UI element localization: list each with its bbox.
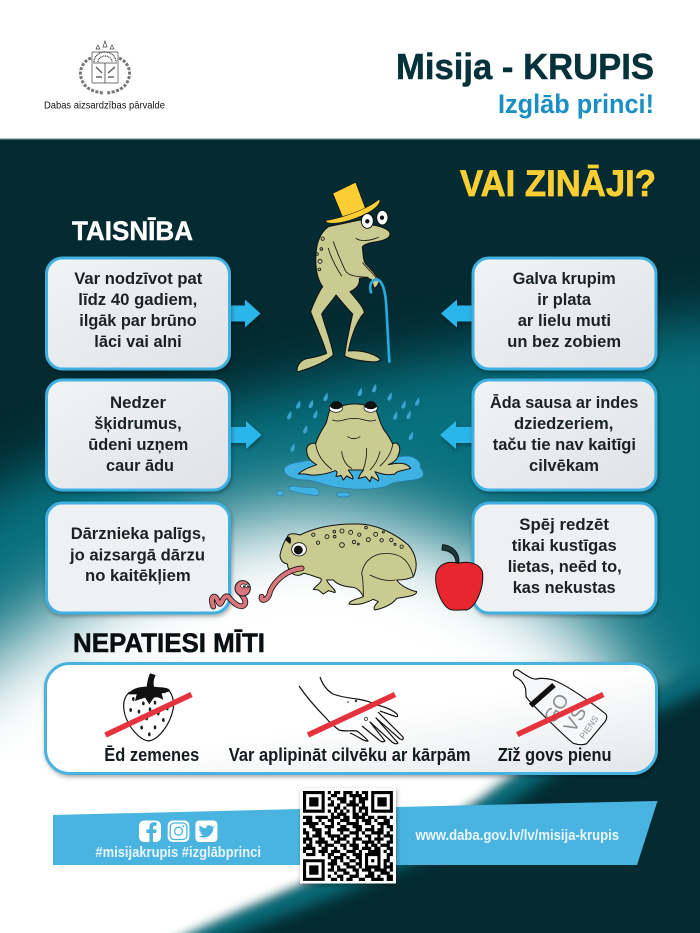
myth: suckles cow milk: [498, 670, 612, 765]
fact box: sight: [473, 503, 656, 613]
subtitle: Izglāb princi!: [498, 89, 654, 119]
heading: NEPATIESI MĪTI: NEPATIESI MĪTI: [73, 628, 265, 658]
fact box: sight: Spēj redzēt: [519, 515, 609, 534]
icon: red apple: [436, 545, 483, 610]
fact box: drinking: Nedzer: [110, 393, 166, 412]
logo text: Dabas aizsardzības pārvalde: [44, 100, 165, 112]
fact box: head: un bez zobiem: [507, 332, 621, 351]
myth: suckles cow milk: PIENS: [577, 714, 601, 741]
hashtags: #misijakrupis #izglābprinci: [95, 844, 261, 861]
myth: eats strawberries: [104, 673, 199, 765]
fact box: gardener: Dārznieka palīgs,: [71, 524, 206, 543]
fact box: gardener: [46, 503, 230, 613]
illustration: toad sitting in rain and puddle: [276, 384, 423, 497]
illustration: old toad with top hat and cane: [297, 182, 390, 372]
arrows pointing to the toads: [228, 300, 475, 449]
header band: [0, 0, 700, 140]
illustration: toad catching a worm with its tongue: [261, 524, 417, 610]
fact box: skin: Āda sausa ar indes: [490, 393, 638, 412]
fact box: sight: tikai kustīgas: [512, 536, 617, 555]
fact box: lifespan: līdz 40 gadiem,: [78, 290, 197, 309]
fact box: skin: dziedzeriem,: [514, 414, 613, 433]
fact box: drinking: caur ādu: [106, 456, 174, 475]
fact box: drinking: [46, 380, 230, 490]
fact box: lifespan: Var nodzīvot pat: [74, 269, 203, 288]
fact box: gardener: jo aizsargā dārzu: [69, 546, 205, 564]
fact box: head: Galva krupim: [513, 269, 616, 288]
myth: suckles cow milk: VS: [560, 703, 591, 736]
logo: state emblem: [80, 41, 130, 93]
heading: VAI ZINĀJI?: VAI ZINĀJI?: [460, 163, 656, 204]
fact box: drinking: šķidrumus,: [94, 414, 182, 433]
fact box: drinking: ūdeni uzņem: [88, 435, 188, 454]
myth: warts from toads: [229, 677, 470, 765]
icon: Facebook: [139, 820, 161, 842]
website link: www.daba.gov.lv/lv/misija-krupis: [415, 827, 619, 844]
icon: Instagram: [168, 820, 189, 842]
panel: myths: [46, 664, 656, 774]
fact box: head: ar lielu muti: [518, 311, 611, 330]
heading: TAISNĪBA: TAISNĪBA: [72, 216, 193, 246]
myth: eats strawberries: Ēd zemenes: [104, 744, 199, 765]
fact box: gardener: no kaitēkļiem: [85, 566, 191, 585]
fact box: sight: kas nekustas: [513, 578, 616, 597]
title: Misija - KRUPIS: [396, 46, 654, 87]
icon: Twitter: [195, 820, 217, 842]
fact box: head: [473, 258, 656, 369]
fact box: sight: lietas, neēd to,: [508, 557, 622, 576]
footer band: [53, 801, 658, 865]
fact box: skin: taču tie nav kaitīgi: [493, 435, 636, 454]
QR code: [300, 788, 396, 884]
myth: suckles cow milk: Zīž govs pienu: [498, 744, 612, 765]
fact box: lifespan: ilgāk par brūno: [79, 311, 197, 330]
myth: warts from toads: Var aplipināt cilvēku ar kārpām: [229, 744, 470, 765]
fact box: lifespan: lāci vai alni: [94, 332, 182, 351]
fact box: skin: cilvēkam: [529, 456, 599, 475]
myth: suckles cow milk: GO: [541, 691, 574, 727]
fact box: skin: [473, 380, 656, 490]
fact box: head: ir plata: [537, 290, 592, 309]
fact box: lifespan: [46, 258, 230, 369]
icon: worm: [212, 581, 250, 607]
